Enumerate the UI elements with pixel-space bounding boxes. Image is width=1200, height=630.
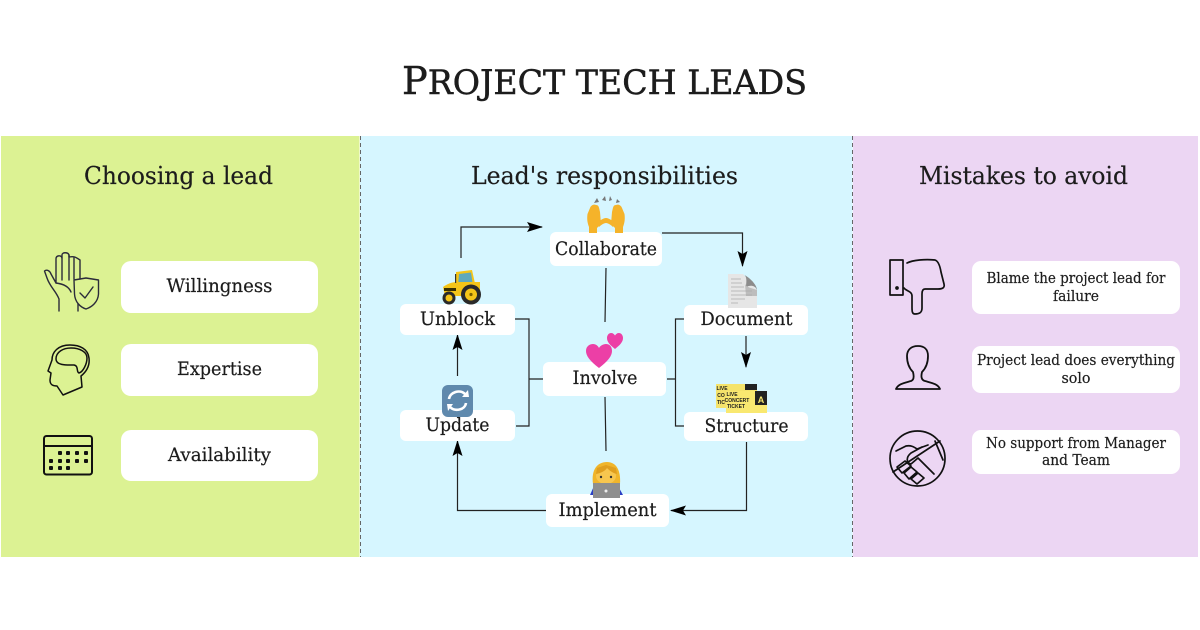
box: blame: Blame the project lead for <box>986 269 1166 287</box>
box: blame: failure <box>1053 287 1099 305</box>
icon: tickets: TIC <box>717 400 725 406</box>
box: structure <box>684 412 808 441</box>
heading: lead's responsibilities: Lead's responsibilities <box>471 162 738 190</box>
icon: tickets: CO <box>717 393 725 399</box>
title: PROJECT TECH LEADS <box>402 59 807 104</box>
box: implement: Implement <box>558 499 657 521</box>
box: willingness: Willingness <box>166 275 272 297</box>
panel: mistakes to avoid <box>853 136 1198 557</box>
box: involve: Involve <box>572 367 638 389</box>
box: blame <box>972 261 1180 314</box>
box: solo: Project lead does everything <box>977 351 1175 369</box>
panel: choosing a lead <box>1 136 360 557</box>
icon: person <box>896 346 940 389</box>
icon: tickets: LIVE <box>716 386 728 392</box>
box: availability <box>121 430 318 481</box>
box: solo: solo <box>1062 369 1090 387</box>
box: expertise <box>121 344 318 396</box>
connectors <box>458 227 746 510</box>
box: document <box>684 305 808 335</box>
panel: lead's responsibilities <box>360 136 852 557</box>
icon: refresh <box>442 385 473 417</box>
icon: hand with shield <box>44 253 98 311</box>
box: implement <box>546 494 669 527</box>
icon: tickets: A <box>758 395 765 405</box>
icon: thumbs down <box>890 260 944 314</box>
box: document: Document <box>700 308 793 330</box>
icon: raised hands <box>587 196 625 233</box>
icon: tractor <box>442 270 481 304</box>
box: solo <box>972 346 1180 393</box>
box: involve <box>543 362 666 396</box>
box: availability: Availability <box>167 444 271 466</box>
box: unblock <box>400 304 515 335</box>
box: no support: No support from Manager <box>986 434 1167 452</box>
icon: tickets: CONCERT <box>725 398 749 404</box>
icon: hearts <box>586 333 623 368</box>
icon: tickets: LIVE <box>726 392 738 398</box>
heading: choosing a lead: Choosing a lead <box>84 162 273 190</box>
heading: mistakes to avoid: Mistakes to avoid <box>919 162 1128 190</box>
box: structure: Structure <box>704 415 788 437</box>
box: collaborate <box>550 232 662 266</box>
box: no support: and Team <box>1042 451 1110 469</box>
icon: document <box>728 274 757 308</box>
box: willingness <box>121 261 318 313</box>
box: unblock: Unblock <box>420 308 495 330</box>
box: collaborate: Collaborate <box>555 238 657 260</box>
icon: calendar <box>44 436 92 474</box>
icon: tickets: TICKET <box>727 404 745 410</box>
icon: tickets <box>716 384 767 413</box>
icon: woman at laptop <box>590 462 623 498</box>
box: no support <box>972 430 1180 474</box>
box: update <box>400 410 515 441</box>
icon: no handshake <box>890 431 945 486</box>
box: update: Update <box>426 414 490 436</box>
box: expertise: Expertise <box>177 358 262 380</box>
icon: head with brain <box>48 345 89 395</box>
